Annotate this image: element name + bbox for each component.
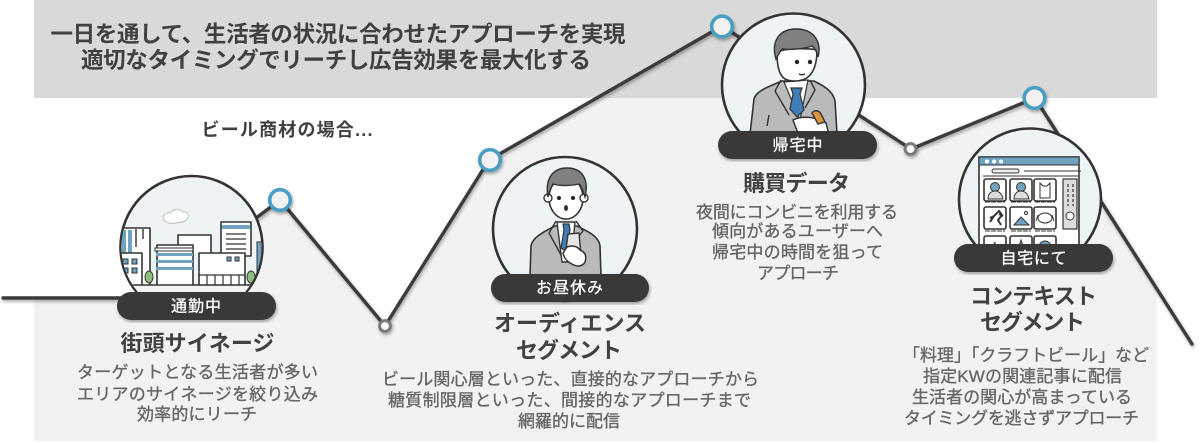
text block: audience segment: [382, 311, 759, 431]
day-long trend line: [3, 26, 1192, 344]
description: 網羅的に配信: [518, 412, 620, 431]
pill: lunch break: お昼休み: [536, 279, 603, 297]
description: ビール関心層といった、直接的なアプローチから: [382, 370, 759, 389]
text block: street signage: [77, 331, 318, 424]
description: 傾向があるユーザーへ: [712, 222, 883, 241]
heading: コンテキスト: [970, 284, 1097, 309]
panel: context illustration: [958, 127, 1102, 244]
description: 生活者の関心が高まっている: [912, 388, 1132, 407]
pill: at home: [954, 244, 1113, 272]
heading: 購買データ: [743, 171, 850, 196]
description: [382, 370, 759, 431]
heading line 1: 一日を通して、生活者の状況に合わせたアプローチを実現: [50, 22, 626, 47]
icon: man with smartphone: [530, 168, 601, 276]
heading line 2: 適切なタイミングでリーチし広告効果を最大化する: [81, 47, 591, 73]
text block: context segment: [903, 284, 1149, 428]
pill: going home: 帰宅中: [772, 136, 822, 154]
description: 糖質制限層といった、間接的なアプローチまで: [388, 391, 751, 410]
pill: lunch break: [491, 274, 649, 302]
heading: オーディエンス: [494, 311, 646, 336]
icon: cloud: [163, 209, 188, 223]
description: タイミングを逃さずアプローチ: [904, 409, 1139, 428]
description: 「料理」「クラフトビール」など: [903, 346, 1149, 365]
description: [696, 203, 898, 283]
description: 指定KWの関連記事に配信: [923, 367, 1122, 386]
description: 帰宅中の時間を狙って: [712, 243, 883, 262]
description: ターゲットとなる生活者が多い: [77, 363, 318, 382]
icon: city buildings: [122, 221, 262, 292]
pill: commute: 通勤中: [171, 298, 221, 316]
pill: commute: [117, 292, 276, 320]
description: [903, 346, 1149, 428]
description: [77, 363, 318, 424]
blue nodes: [270, 16, 1045, 210]
heading: セグメント: [980, 310, 1085, 335]
panel: purchase illustration: [720, 12, 866, 131]
description: 効率的にリーチ: [137, 405, 257, 424]
pill: at home: 自宅にて: [1000, 250, 1066, 268]
description: エリアのサイネージを絞り込み: [77, 385, 318, 404]
heading: セグメント: [516, 338, 622, 363]
text block: purchase data: [696, 171, 898, 283]
icon: man checking watch: [750, 29, 837, 136]
description: 夜間にコンビニを利用する: [696, 203, 898, 222]
icon: browser window: [978, 156, 1081, 244]
heading: 街頭サイネージ: [120, 331, 274, 356]
grey nodes: [380, 144, 916, 331]
heading: [970, 284, 1097, 335]
description: アプローチ: [757, 264, 839, 283]
panel: audience illustration: [493, 157, 637, 301]
heading: [494, 311, 646, 363]
panel: commute illustration: [119, 174, 264, 292]
top heading band: [34, 0, 1157, 98]
beer example note: ビール商材の場合...: [202, 119, 372, 140]
pill: going home: [718, 131, 877, 159]
